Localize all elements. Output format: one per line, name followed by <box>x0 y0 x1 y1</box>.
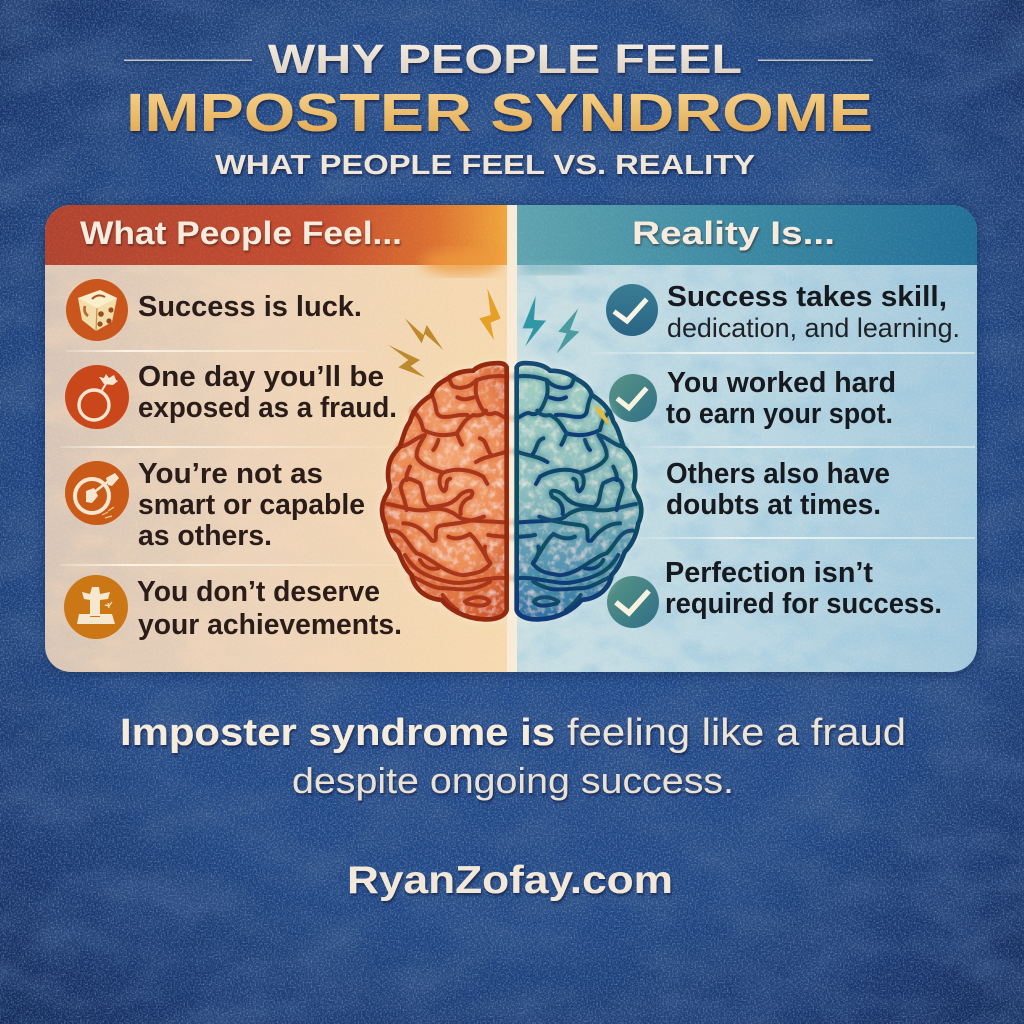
row dividers <box>60 350 975 566</box>
bolt: teal one <box>523 296 546 347</box>
text: success takes skill: dedication, and learning. <box>667 313 960 343</box>
text: not as smart: smart or capable <box>138 489 365 521</box>
text: worked hard <box>666 367 896 430</box>
text: perfection: Perfection isn’t <box>665 557 874 589</box>
definition line one: feeling like a fraud <box>567 712 906 754</box>
icon: check one <box>606 284 658 336</box>
bolt: brown lower <box>388 345 425 377</box>
text: success is luck: Success is luck. <box>138 291 362 323</box>
brain glow <box>382 363 641 619</box>
title: why people feel: WHY PEOPLE FEEL <box>268 36 742 82</box>
left hemisphere <box>382 363 507 619</box>
icon: check three <box>607 576 659 628</box>
panel shadow <box>45 207 977 674</box>
definition line two: despite ongoing success. <box>292 760 734 801</box>
definition statement <box>120 712 906 801</box>
right hemisphere <box>517 363 641 619</box>
icon: check two <box>609 374 657 422</box>
text: not as smart: You’re not as <box>138 458 323 490</box>
text: worked hard: to earn your spot. <box>666 398 893 430</box>
text: don't deserve: You don’t deserve <box>137 576 380 608</box>
subtitle: WHAT PEOPLE FEEL VS. REALITY <box>215 149 755 180</box>
header: what people feel: What People Feel... <box>80 215 402 251</box>
text: success takes skill <box>667 281 960 343</box>
bolt: orange <box>479 288 501 340</box>
text: exposed as a fraud: One day you’ll be <box>138 361 384 393</box>
text: don't deserve: your achievements. <box>138 609 402 641</box>
icon: dice <box>66 279 128 341</box>
comparison panel <box>45 205 977 674</box>
icon: ring with spark <box>65 365 129 429</box>
panel surfaces <box>45 205 977 672</box>
text: exposed as a fraud: exposed as a fraud. <box>138 392 397 424</box>
text: perfection <box>665 557 942 620</box>
brain illustration <box>382 288 641 619</box>
text: not as smart: as others. <box>138 520 272 552</box>
icon: podium trophy <box>64 575 128 639</box>
website: RyanZofay.com <box>347 859 673 902</box>
text: others have doubts <box>666 458 890 521</box>
title block <box>124 36 873 180</box>
text: exposed as a fraud <box>138 361 397 424</box>
text: not as smart <box>138 458 365 552</box>
definition line one: Imposter syndrome is <box>120 712 555 754</box>
icon: target with arrow <box>65 461 129 525</box>
bolt: teal two <box>557 308 579 353</box>
header: reality is: Reality Is... <box>632 215 835 251</box>
text: don't deserve <box>137 576 402 641</box>
yellow highlight <box>593 405 610 424</box>
text: worked hard: You worked hard <box>667 367 896 399</box>
title: imposter syndrome: IMPOSTER SYNDROME <box>126 83 873 143</box>
text: success takes skill: Success takes skill, <box>667 281 947 313</box>
bolt: brown upper <box>405 318 443 350</box>
text: others have doubts: Others also have <box>666 458 890 490</box>
text: perfection: required for success. <box>665 588 942 620</box>
text: others have doubts: doubts at times. <box>666 489 881 521</box>
